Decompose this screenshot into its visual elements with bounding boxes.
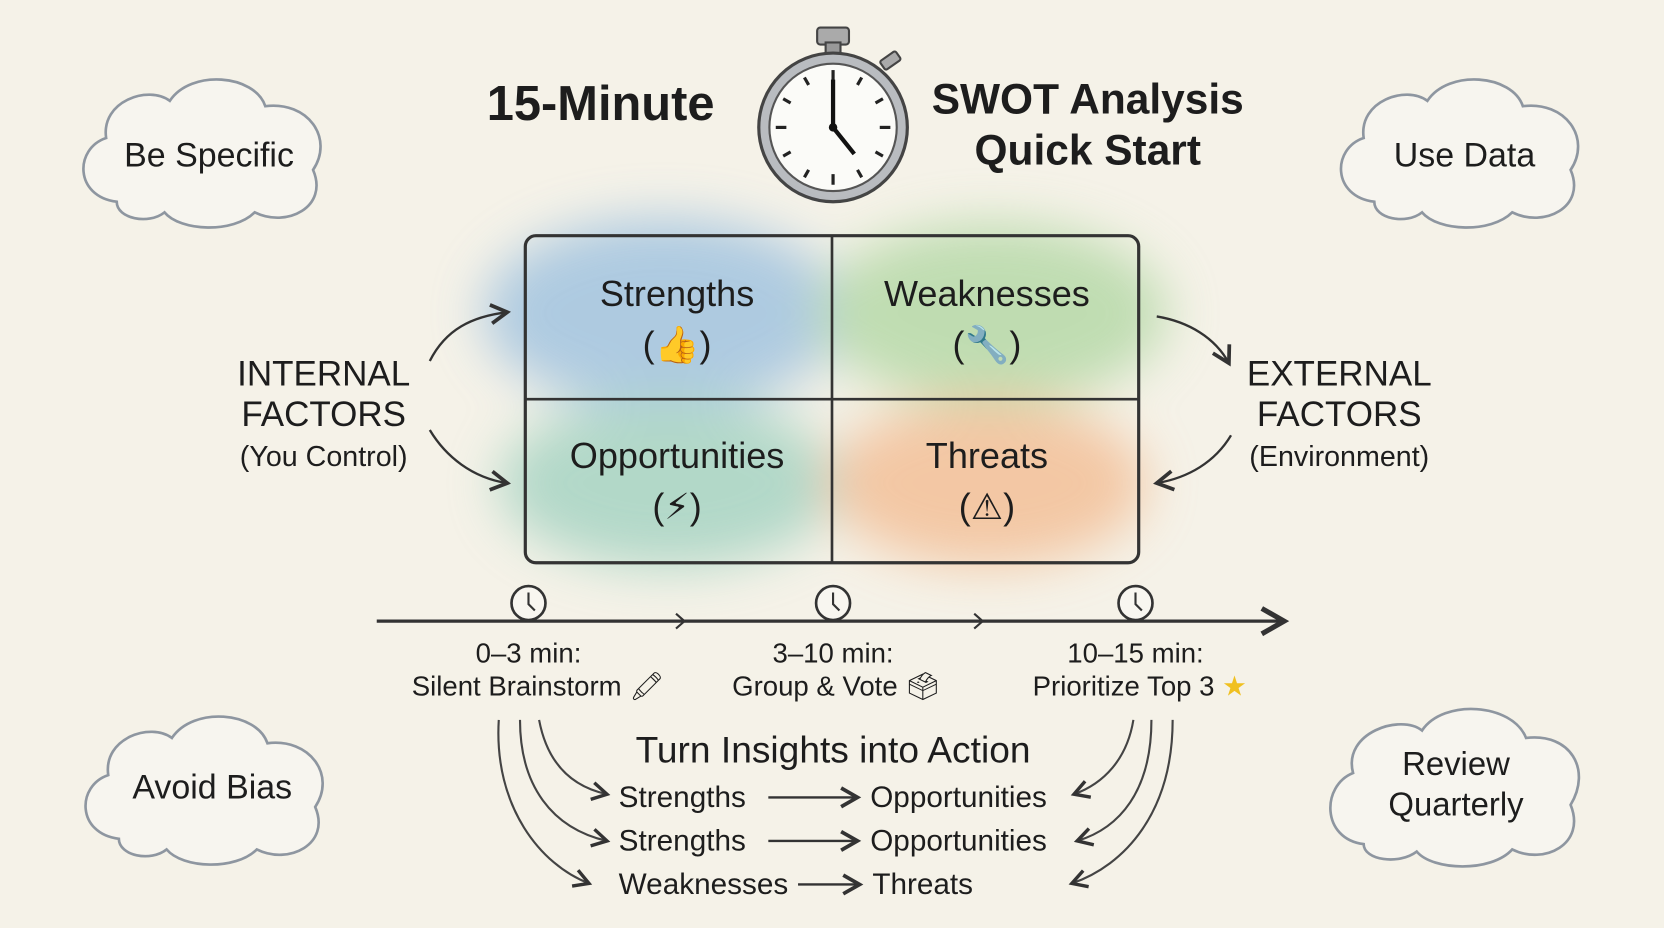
action list xyxy=(619,781,1047,901)
quadrant: Threats: Threats xyxy=(926,435,1048,476)
step 2 label xyxy=(732,638,940,701)
title: SWOT Analysis Quick Start xyxy=(932,76,1244,174)
quadrant: Threats xyxy=(926,435,1048,527)
icon: clock 2 xyxy=(816,586,850,620)
text: external factors: FACTORS xyxy=(1257,395,1422,434)
action list: Strengths xyxy=(619,824,746,857)
arrows: internal xyxy=(430,312,507,483)
action list: Strengths xyxy=(619,781,746,814)
quadrant: Strengths xyxy=(600,273,754,365)
quadrant: Opportunities: Opportunities xyxy=(570,435,784,476)
quadrant: Opportunities: (⚡) xyxy=(652,486,702,527)
text: internal factors: FACTORS xyxy=(241,395,406,434)
quadrant: Weaknesses xyxy=(884,273,1090,365)
action list: Threats xyxy=(872,868,973,901)
cloud: Use Data: Use Data xyxy=(1394,137,1535,175)
cloud: Review Quarterly: Review xyxy=(1402,745,1510,782)
step 1 label: Silent Brainstorm 🖍 xyxy=(412,670,664,701)
text: external factors: (Environment) xyxy=(1249,441,1429,473)
step 3 label: 10–15 min: xyxy=(1067,638,1204,669)
quadrant: Threats: (⚠) xyxy=(959,486,1015,527)
action list: Weaknesses xyxy=(619,868,788,901)
quadrant: Strengths: Strengths xyxy=(600,273,754,314)
quadrant: Opportunities xyxy=(570,435,784,527)
cloud: Review Quarterly xyxy=(1330,709,1579,866)
step 2 label: 3–10 min: xyxy=(773,638,894,669)
icon: clock 1 xyxy=(512,586,545,620)
step 1 label: 0–3 min: xyxy=(476,638,581,669)
cloud: Be Specific xyxy=(83,79,321,227)
arrows: left curves to actions xyxy=(498,720,607,883)
title: SWOT Analysis Quick Start: Quick Start xyxy=(975,127,1201,174)
action list: Opportunities xyxy=(870,781,1047,814)
step 2 label: Group & Vote 🗳 xyxy=(732,670,940,701)
cloud: Avoid Bias xyxy=(86,717,323,865)
cloud: Avoid Bias: Avoid Bias xyxy=(132,768,292,806)
heading: Turn Insights into Action: Turn Insights into Action xyxy=(636,728,1031,770)
action list: Opportunities xyxy=(870,824,1047,857)
step 3 label xyxy=(1033,638,1247,701)
arrows: external xyxy=(1157,316,1231,483)
text: external factors: EXTERNAL xyxy=(1247,354,1432,393)
quadrant: Weaknesses: Weaknesses xyxy=(884,273,1090,314)
icon: stopwatch xyxy=(759,28,907,202)
text: external factors xyxy=(1247,354,1432,473)
panel: SWOT grid xyxy=(483,218,1167,568)
icon: clock 3 xyxy=(1119,586,1152,620)
text: internal factors xyxy=(237,354,410,473)
arrows: right curves to actions xyxy=(1072,720,1173,883)
timeline xyxy=(377,586,1284,701)
title: SWOT Analysis Quick Start: SWOT Analysis xyxy=(932,76,1244,123)
text: internal factors: (You Control) xyxy=(240,441,408,473)
title: 15-Minute: 15-Minute xyxy=(487,77,715,131)
step 3 label: Prioritize Top 3 ★ xyxy=(1033,670,1247,701)
cloud: Be Specific: Be Specific xyxy=(124,137,294,175)
text: internal factors: INTERNAL xyxy=(237,354,410,393)
quadrant: Weaknesses: (🔧) xyxy=(952,323,1021,365)
cloud: Use Data xyxy=(1341,79,1578,227)
quadrant: Strengths: (👍) xyxy=(643,324,712,365)
cloud: Review Quarterly: Quarterly xyxy=(1388,785,1524,822)
step 1 label xyxy=(412,638,664,701)
